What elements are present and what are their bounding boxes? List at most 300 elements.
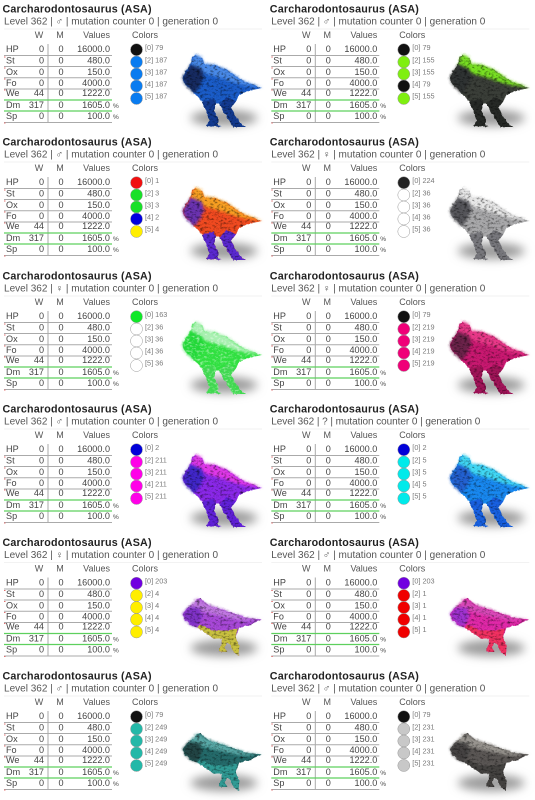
card title: Carcharodontosaurus (ASA) — [2, 270, 152, 282]
stats table: 0 — [326, 767, 331, 777]
stats table: M — [56, 297, 64, 307]
stats table: % — [113, 381, 119, 388]
color swatches: [5] 211 — [145, 492, 167, 500]
color swatches: [5] 231 — [412, 758, 435, 768]
stats table: 0 — [326, 755, 331, 765]
color swatches: Colors — [399, 163, 426, 173]
stats table: 0 — [326, 244, 331, 254]
stats table: 0 — [326, 634, 331, 644]
color swatches: Colors — [132, 297, 159, 307]
stats table: 480.0 — [355, 456, 377, 466]
color swatches: Colors — [399, 430, 426, 440]
level line: Level 362 | ♀ | mutation counter 0 | generation 0 — [271, 284, 486, 294]
icon: dinosaur — [450, 597, 530, 656]
stats table: 1605.0 — [82, 500, 110, 510]
stats table: 0 — [58, 722, 64, 732]
stats table: Dm — [6, 367, 20, 377]
stats table: 0 — [326, 221, 331, 231]
level line: Level 362 | ♀ | mutation counter 0 | generation 0 — [4, 550, 218, 561]
stats table: 0 — [58, 755, 64, 765]
stats table: % — [113, 781, 119, 788]
color swatches: [0] 1 — [145, 176, 159, 185]
stats table: 0 — [306, 378, 311, 388]
stats table: W — [302, 430, 311, 440]
stats table: 16000.0 — [77, 177, 110, 187]
stats table: 0 — [58, 378, 64, 388]
stats table: 0 — [58, 111, 64, 121]
stats table: 0 — [326, 200, 331, 210]
stats table: Sp — [6, 644, 17, 654]
color swatches: [0] 2 — [412, 443, 427, 452]
stats table: 317 — [29, 233, 44, 243]
color swatches: [4] 79 — [412, 80, 431, 88]
stats table: 100.0 — [355, 511, 377, 521]
level line: Level 362 | ♂ | mutation counter 0 | generation 0 — [271, 550, 486, 561]
stats table: 0 — [306, 612, 311, 622]
icon: dinosaur — [183, 732, 262, 791]
color swatches: [5] 5 — [412, 492, 427, 500]
stats table: 44 — [34, 88, 44, 98]
stats table: % — [380, 781, 386, 788]
stats table: 0 — [306, 334, 311, 344]
stats table: 4000.0 — [349, 345, 377, 355]
stats table: Ox — [6, 467, 18, 477]
color swatches — [398, 163, 435, 238]
color swatches: [4] 231 — [412, 746, 435, 756]
stats table: 1222.0 — [82, 221, 110, 231]
color swatches: [3] 36 — [412, 200, 431, 210]
stats table: Dm — [273, 367, 287, 377]
stats table: 100.0 — [87, 644, 110, 654]
color swatches: [5] 4 — [145, 625, 159, 634]
stats table: 317 — [29, 767, 44, 777]
stats table: Dm — [273, 500, 287, 510]
stats table: 0 — [306, 456, 311, 466]
stats table: 0 — [306, 478, 311, 488]
icon: dinosaur — [183, 321, 262, 394]
color swatches: [5] 36 — [412, 224, 431, 234]
stats table: 0 — [326, 311, 331, 321]
color swatches — [130, 430, 167, 504]
color swatches — [398, 297, 435, 372]
stats table: 0 — [326, 444, 331, 454]
stats table — [273, 697, 386, 788]
stats table: 480.0 — [87, 56, 110, 66]
stats table: 0 — [58, 478, 64, 488]
stats table: Values — [83, 297, 110, 307]
stats table: Dm — [6, 634, 20, 644]
color swatches: [3] 3 — [145, 200, 159, 210]
stats table: Values — [350, 30, 378, 40]
stats table: 1222.0 — [82, 755, 110, 765]
stats table: Fo — [273, 78, 284, 88]
stats table: % — [380, 381, 386, 388]
stats table: % — [380, 648, 386, 654]
stats table: 1605.0 — [349, 367, 377, 377]
stats table: HP — [273, 44, 286, 54]
card title: Carcharodontosaurus (ASA) — [270, 537, 419, 549]
stats table: 1605.0 — [82, 100, 110, 110]
stats table: 0 — [39, 778, 44, 788]
stats table: 0 — [39, 444, 44, 454]
stats table: 100.0 — [355, 778, 377, 788]
stats table: W — [302, 697, 311, 707]
stats table: 0 — [39, 311, 44, 321]
stats table: 0 — [306, 467, 311, 477]
stats table: 0 — [326, 745, 331, 755]
color swatches: [5] 219 — [412, 358, 435, 368]
stats table: Sp — [6, 511, 17, 521]
card: bright green, row 3 left — [2, 270, 262, 394]
stats table: 0 — [306, 778, 311, 788]
stats table: Sp — [273, 644, 284, 654]
stats table: % — [113, 236, 119, 243]
color swatches: [2] 4 — [145, 589, 159, 598]
stats table: 0 — [58, 221, 64, 231]
stats table: % — [380, 503, 386, 510]
level line: Level 362 | ♂ | mutation counter 0 | generation 0 — [271, 16, 486, 28]
stats table — [6, 163, 119, 254]
stats table: 0 — [58, 711, 64, 721]
stats table: 150.0 — [355, 67, 377, 77]
color swatches — [130, 564, 167, 638]
stats table: 0 — [326, 589, 331, 599]
stats table: 317 — [296, 367, 311, 377]
stats table: 0 — [39, 644, 44, 654]
stats table: 16000.0 — [77, 44, 110, 54]
stats table: 0 — [58, 322, 64, 332]
stats table — [6, 430, 119, 521]
stats table: 0 — [306, 734, 311, 744]
level line: Level 362 | ♂ | mutation counter 0 | generation 0 — [4, 416, 218, 428]
stats table: Fo — [273, 345, 284, 355]
stats table: 0 — [306, 511, 311, 521]
stats table: 44 — [301, 622, 311, 632]
stats table: 4000.0 — [82, 612, 110, 622]
stats table: 1222.0 — [349, 755, 377, 765]
stats table: 0 — [326, 100, 331, 110]
color swatches — [398, 564, 435, 638]
stats table: Ox — [273, 200, 285, 210]
stats table: 4000.0 — [82, 478, 110, 488]
stats table: 0 — [306, 444, 311, 454]
stats table: 480.0 — [355, 589, 377, 599]
stats table: 0 — [39, 600, 44, 610]
icon: dinosaur — [450, 54, 530, 127]
stats table: We — [273, 355, 287, 365]
stats table: % — [113, 370, 119, 377]
card: blue, row 1 left — [2, 4, 262, 127]
stats table: 317 — [29, 100, 44, 110]
stats table: 44 — [301, 355, 311, 365]
stats table: 0 — [326, 345, 331, 355]
color swatches: [4] 2 — [145, 212, 159, 222]
stats table: W — [35, 564, 44, 574]
stats table: 16000.0 — [77, 311, 110, 321]
stats table: 317 — [296, 233, 311, 243]
stats table: 0 — [39, 467, 44, 477]
stats table: % — [113, 103, 119, 110]
stats table: 1605.0 — [82, 367, 110, 377]
stats table: 100.0 — [355, 644, 377, 654]
stats table: 0 — [58, 44, 64, 54]
stats table: 100.0 — [87, 511, 110, 521]
stats table: 0 — [326, 600, 331, 610]
stats table: 0 — [58, 767, 64, 777]
card: teal, row 6 left — [2, 670, 262, 791]
stats table: 317 — [296, 100, 311, 110]
card: grey, row 6 right — [270, 670, 530, 791]
stats table: 0 — [39, 578, 44, 588]
stats table: 1222.0 — [349, 622, 377, 632]
stats table: We — [273, 88, 287, 98]
stats table: Sp — [273, 244, 284, 254]
stats table: Values — [83, 163, 110, 173]
stats table: 0 — [58, 355, 64, 365]
stats table — [273, 30, 386, 121]
stats table: % — [380, 236, 386, 243]
stats table: 150.0 — [87, 467, 110, 477]
color swatches: [2] 155 — [412, 56, 435, 64]
stats table: 0 — [326, 355, 331, 365]
stats table: 44 — [301, 88, 311, 98]
stats table: We — [273, 755, 287, 765]
stats table: 480.0 — [87, 322, 110, 332]
stats table: 0 — [306, 589, 311, 599]
stats table: Ox — [273, 67, 285, 77]
stats table: HP — [273, 177, 286, 187]
color swatches: [4] 5 — [412, 480, 427, 488]
stats table: % — [380, 514, 386, 521]
stats table: 150.0 — [87, 200, 110, 210]
color swatches: [5] 36 — [145, 358, 163, 368]
level line: Level 362 | ♂ | mutation counter 0 | generation 0 — [271, 684, 486, 694]
stats table: Ox — [6, 734, 18, 744]
stats table: Sp — [273, 511, 284, 521]
stats table: Sp — [273, 778, 284, 788]
level line: Level 362 | ♀ | mutation counter 0 | generation 0 — [4, 284, 218, 294]
stats table: Ox — [273, 600, 285, 610]
stats table: We — [6, 755, 19, 765]
stats table — [6, 30, 119, 121]
stats table: % — [113, 247, 119, 254]
stats table: St — [6, 56, 15, 66]
stats table: 0 — [306, 745, 311, 755]
color swatches: [3] 1 — [412, 601, 427, 610]
stats table: Sp — [6, 111, 17, 121]
stats table: 44 — [34, 622, 44, 632]
stats table: St — [6, 322, 15, 332]
stats table: 100.0 — [355, 378, 377, 388]
color swatches: [0] 2 — [145, 443, 159, 452]
stats table: 1222.0 — [82, 622, 110, 632]
stats table: 0 — [39, 478, 44, 488]
stats table: 0 — [39, 511, 44, 521]
stats table: St — [6, 722, 15, 732]
stats table: Fo — [6, 211, 17, 221]
stats table: 0 — [326, 378, 331, 388]
stats table: M — [324, 297, 331, 307]
stats table: Ox — [273, 467, 285, 477]
stats table: 317 — [296, 500, 311, 510]
stats table: 0 — [58, 211, 64, 221]
color swatches — [130, 30, 167, 104]
stats table: 0 — [39, 456, 44, 466]
stats table: 0 — [58, 67, 64, 77]
stats table: St — [273, 456, 282, 466]
color swatches: Colors — [399, 30, 426, 40]
stats table: Values — [83, 430, 110, 440]
stats table: Dm — [273, 100, 287, 110]
stats table: Sp — [273, 378, 284, 388]
stats table: % — [380, 370, 386, 377]
stats table: 150.0 — [355, 334, 377, 344]
stats table: 0 — [39, 177, 44, 187]
stats table: Dm — [6, 233, 20, 243]
stats table: 1222.0 — [349, 355, 377, 365]
stats table: HP — [6, 44, 19, 54]
stats table: 0 — [39, 78, 44, 88]
stats table: 317 — [29, 367, 44, 377]
stats table: 0 — [306, 78, 311, 88]
stats table: 1605.0 — [349, 767, 377, 777]
stats table: 1605.0 — [82, 767, 110, 777]
icon: dinosaur — [450, 321, 530, 394]
color swatches: [3] 249 — [145, 734, 167, 744]
stats table: W — [35, 430, 44, 440]
stats table: Fo — [6, 745, 17, 755]
stats table: 0 — [326, 622, 331, 632]
stats table: % — [113, 514, 119, 521]
stats table: W — [302, 163, 311, 173]
color swatches: [4] 211 — [145, 480, 167, 488]
stats table: % — [380, 103, 386, 110]
stats table: 0 — [306, 600, 311, 610]
card: cyan-blue, row 4 right — [270, 404, 530, 527]
stats table: 0 — [58, 622, 64, 632]
stats table: 0 — [39, 745, 44, 755]
color swatches: [4] 36 — [145, 346, 163, 356]
stats table: M — [324, 30, 331, 40]
stats table: We — [273, 622, 287, 632]
stats table: 0 — [326, 722, 331, 732]
stats table: 0 — [39, 612, 44, 622]
stats table: % — [380, 247, 386, 254]
stats table: 0 — [326, 478, 331, 488]
stats table: 150.0 — [355, 200, 377, 210]
stats table: 0 — [326, 488, 331, 498]
stats table: 0 — [58, 456, 64, 466]
card title: Carcharodontosaurus (ASA) — [2, 670, 152, 682]
stats table: 16000.0 — [344, 44, 377, 54]
stats table: 0 — [326, 500, 331, 510]
stats table: 0 — [58, 88, 64, 98]
color swatches: [5] 187 — [145, 92, 167, 100]
level line: Level 362 | ♂ | mutation counter 0 | generation 0 — [4, 150, 218, 160]
stats table: % — [380, 636, 386, 644]
color swatches: [0] 79 — [145, 710, 163, 719]
stats table: 44 — [301, 221, 311, 231]
color swatches: [0] 224 — [412, 176, 435, 185]
stats table: 4000.0 — [349, 745, 377, 755]
stats table: 0 — [58, 233, 64, 243]
card: green-black, row 1 right — [270, 4, 530, 127]
color swatches: [2] 219 — [412, 322, 435, 332]
stats table: We — [6, 488, 19, 498]
stats table: 0 — [306, 67, 311, 77]
stats table: 480.0 — [355, 722, 377, 732]
stats table: 0 — [39, 56, 44, 66]
color swatches: [0] 203 — [145, 576, 167, 586]
icon: dinosaur — [183, 187, 262, 260]
stats table: 16000.0 — [77, 711, 110, 721]
stats table: 150.0 — [355, 600, 377, 610]
color swatches: [2] 249 — [145, 722, 167, 732]
stats table: 4000.0 — [82, 78, 110, 88]
stats table: 0 — [58, 56, 64, 66]
stats table: 0 — [39, 244, 44, 254]
stats table: Values — [83, 697, 110, 707]
stats table: 0 — [58, 612, 64, 622]
stats table: St — [273, 722, 282, 732]
stats table: Values — [350, 564, 378, 574]
color swatches: [3] 5 — [412, 468, 427, 476]
stats table: 4000.0 — [82, 211, 110, 221]
stats table: M — [56, 430, 64, 440]
stats table: 1605.0 — [82, 233, 110, 243]
level line: Level 362 | ? | mutation counter 0 | generation 0 — [271, 416, 481, 428]
stats table: 44 — [34, 355, 44, 365]
stats table: 0 — [326, 88, 331, 98]
card: multicolor, row 2 left — [2, 136, 262, 260]
icon: dinosaur — [450, 454, 530, 527]
stats table: Values — [350, 697, 378, 707]
icon: dinosaur — [183, 54, 262, 127]
stats table: We — [6, 622, 19, 632]
stats table: 44 — [34, 755, 44, 765]
stats table: 0 — [39, 200, 44, 210]
stats table: St — [273, 188, 282, 198]
stats table: Values — [350, 163, 378, 173]
stats table: M — [56, 30, 64, 40]
stats table: 4000.0 — [349, 211, 377, 221]
color swatches: [0] 79 — [412, 310, 431, 319]
color swatches: Colors — [132, 564, 159, 574]
stats table: M — [324, 564, 331, 574]
stats table: % — [113, 648, 119, 654]
stats table: 0 — [326, 177, 331, 187]
card title: Carcharodontosaurus (ASA) — [2, 537, 152, 549]
color swatches: [4] 219 — [412, 346, 435, 356]
stats table: 0 — [39, 334, 44, 344]
stats table: St — [273, 56, 282, 66]
stats table: 1222.0 — [82, 355, 110, 365]
stats table: 0 — [326, 78, 331, 88]
stats table: 0 — [39, 322, 44, 332]
stats table: 0 — [58, 367, 64, 377]
color swatches: [2] 5 — [412, 456, 427, 464]
stats table: W — [35, 297, 44, 307]
stats table: 0 — [306, 722, 311, 732]
icon: dinosaur — [450, 187, 530, 260]
stats table: St — [273, 322, 282, 332]
card title: Carcharodontosaurus (ASA) — [2, 136, 152, 148]
stats table: 0 — [58, 244, 64, 254]
stats table: 0 — [306, 311, 311, 321]
stats table: 0 — [39, 44, 44, 54]
stats table: 0 — [58, 734, 64, 744]
stats table: % — [380, 770, 386, 777]
